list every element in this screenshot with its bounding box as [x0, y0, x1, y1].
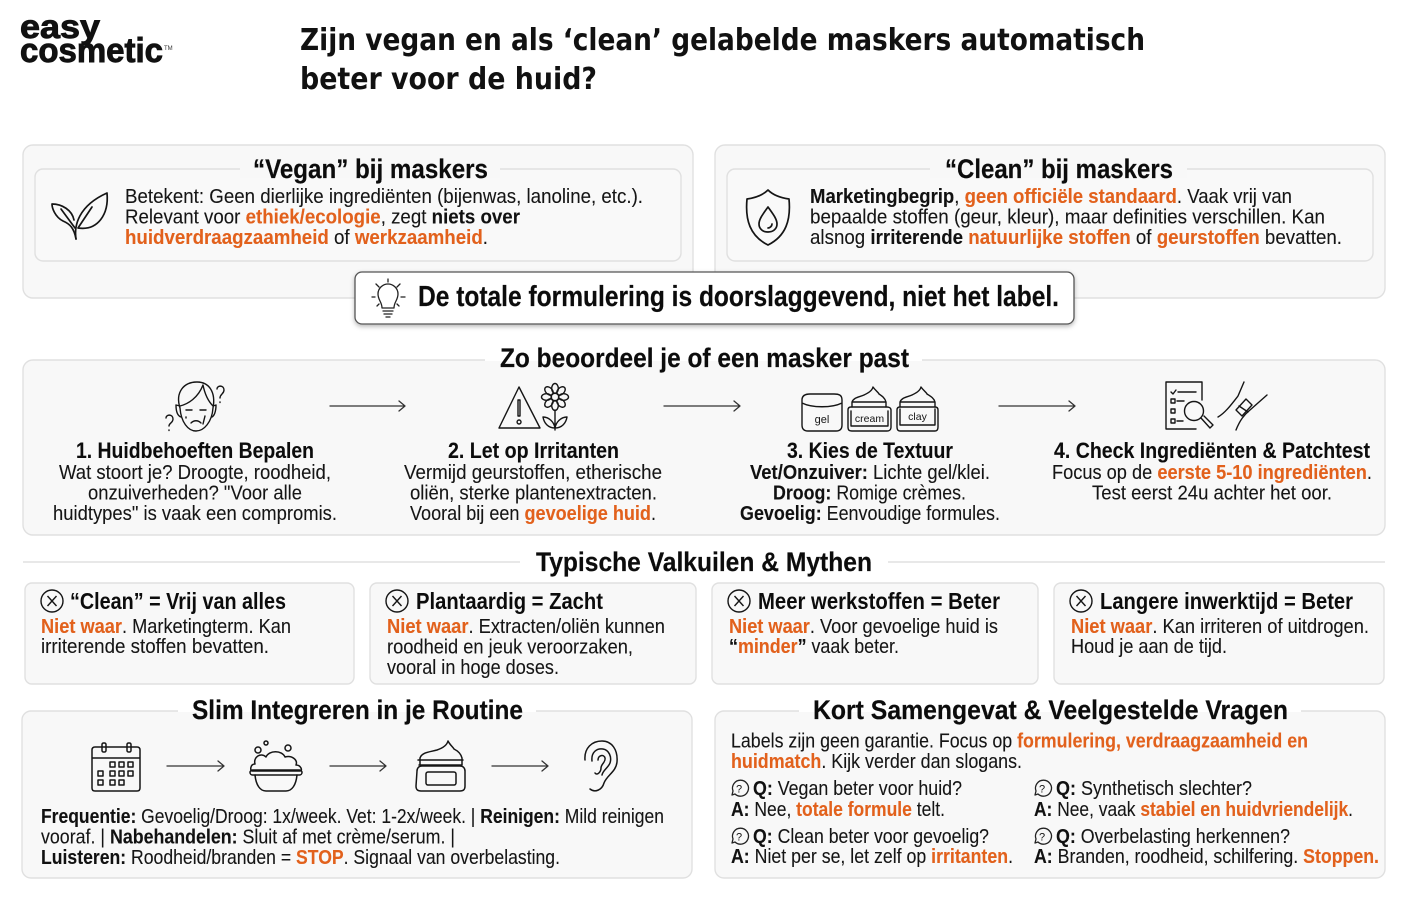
panel: zo beoordeel je: [23, 343, 1385, 535]
card: clean myth: Niet waar. Marketingterm. Kan: [41, 615, 291, 638]
icon: checklist, magnifier and patch: [1166, 382, 1267, 430]
step 2: 2. Let op Irritanten: [448, 438, 619, 463]
step 1: huidtypes" is vaak een compromis.: [53, 502, 337, 525]
card: plant myth: [370, 583, 696, 684]
heading: clean: “Clean” bij maskers: [945, 154, 1173, 184]
icon: bowl with foam: [250, 741, 302, 791]
faq: synthetisch: A: Nee, vaak stabiel en huidvriendelijk.: [1034, 798, 1353, 821]
icon: cross circle: [41, 590, 63, 612]
icon: face with question marks: [166, 382, 224, 431]
card: actives myth: Niet waar. Voor gevoelige huid is: [729, 615, 998, 638]
card: time myth: Langere inwerktijd = Beter: [1100, 588, 1353, 614]
title: Zijn vegan en als ‘clean’ gelabelde maskers automatisch: [300, 23, 1145, 58]
faq: vegan: ?: [736, 784, 742, 796]
card: clean myth: irriterende stoffen bevatten.: [41, 635, 269, 658]
card: clean myth: “Clean” = Vrij van alles: [70, 588, 286, 614]
heading: routine: Slim Integreren in je Routine: [192, 695, 523, 725]
text: vegan body: Betekent: Geen dierlijke ingrediënten (bijenwas, lanoline, etc.).: [125, 185, 643, 208]
icon: cross circle: [386, 590, 408, 612]
panel: routine: [22, 695, 692, 878]
arrow: [167, 761, 224, 771]
faq: synthetisch: [1034, 777, 1353, 821]
panel: summary and faq: [715, 695, 1385, 878]
card: actives myth: “minder” vaak beter.: [729, 635, 899, 658]
arrow: [492, 761, 548, 771]
icon: three jars: cream: [855, 413, 884, 425]
heading: assessment: Zo beoordeel je of een masker past: [500, 343, 909, 373]
text: routine body: Luisteren: Roodheid/branden = STOP. Signaal van overbelasting.: [41, 846, 560, 869]
icon: cross circle: [728, 590, 750, 612]
arrow: [330, 401, 405, 411]
title: beter voor de huid?: [300, 62, 597, 97]
arrow: [999, 401, 1075, 411]
faq: clean: [731, 825, 1013, 868]
card: clean myth: [25, 583, 354, 684]
section: valkuilen: [23, 547, 1385, 684]
faq: overbelasting: ?: [1039, 832, 1045, 844]
step 4: Test eerst 24u achter het oor.: [1092, 482, 1332, 504]
step 2: Vermijd geurstoffen, etherische: [404, 461, 662, 484]
icon: three jars: [802, 387, 938, 431]
card: actives myth: [712, 583, 1038, 684]
text: summary: [731, 730, 1308, 773]
faq: vegan: Q: Vegan beter voor huid?: [753, 777, 962, 800]
text: vegan body: Relevant voor ethiek/ecologie, zegt niets over: [125, 206, 520, 228]
icon: warning and flower: [499, 384, 568, 430]
step 1: Wat stoort je? Droogte, roodheid,: [59, 461, 331, 484]
text: routine body: Frequentie: Gevoelig/Droog: 1x/week. Vet: 1-2x/week. | Reinigen: Mild reinigen: [41, 805, 664, 828]
logo: easy cosmetic: cosmetic: [20, 32, 163, 70]
panel: clean: [715, 145, 1385, 298]
icon: cream jar: [416, 741, 465, 791]
text: clean body: Marketingbegrip, geen officiële standaard. Vaak vrij van: [810, 185, 1292, 208]
text: vegan body: huidverdraagzaamheid of werkzaamheid.: [125, 226, 488, 249]
step 2: Vooral bij een gevoelige huid.: [410, 502, 656, 525]
faq: overbelasting: [1034, 825, 1379, 868]
card: plant myth: Plantaardig = Zacht: [416, 588, 603, 614]
icon: leaves: [52, 193, 107, 239]
faq: clean: A: Niet per se, let zelf op irritanten.: [731, 845, 1013, 868]
faq: overbelasting: Q: Overbelasting herkennen?: [1056, 825, 1290, 848]
text: vegan body: [125, 185, 643, 249]
logo: easy cosmetic: [20, 8, 173, 70]
text: clean body: [810, 185, 1342, 249]
text: routine body: [41, 805, 664, 869]
heading: valkuilen: Typische Valkuilen & Mythen: [536, 547, 872, 577]
card: plant myth: vooral in hoge doses.: [387, 656, 559, 679]
faq: synthetisch: ?: [1039, 784, 1045, 796]
card: time myth: Houd je aan de tijd.: [1071, 635, 1227, 658]
icon: cross circle: [1070, 590, 1092, 612]
step 2: oliën, sterke plantenextracten.: [410, 482, 657, 504]
step 4: Focus op de eerste 5-10 ingrediënten.: [1052, 461, 1372, 484]
step 4: 4. Check Ingrediënten & Patchtest: [1054, 438, 1370, 463]
logo: easy cosmetic: easy: [20, 8, 101, 45]
step 3: Gevoelig: Eenvoudige formules.: [740, 502, 1000, 525]
card: actives myth: Meer werkstoffen = Beter: [758, 588, 1000, 614]
callout: key message: De totale formulering is doorslaggevend, niet het label.: [418, 281, 1059, 313]
faq: clean: Q: Clean beter voor gevoelig?: [753, 825, 989, 848]
icon: three jars: clay: [908, 411, 928, 423]
faq: vegan: [731, 777, 962, 821]
step 3: 3. Kies de Textuur: [787, 438, 953, 463]
panel: vegan: [23, 145, 693, 298]
callout: key message: [355, 272, 1074, 324]
arrow: [664, 401, 740, 411]
step 3: Vet/Onzuiver: Lichte gel/klei.: [750, 461, 990, 484]
step 1: onzuiverheden? "Voor alle: [88, 482, 302, 504]
heading: vegan: “Vegan” bij maskers: [253, 154, 488, 184]
step 1: 1. Huidbehoeften Bepalen: [76, 438, 314, 463]
step 3: Droog: Romige crèmes.: [773, 482, 966, 504]
text: summary: Labels zijn geen garantie. Focus op formulering, verdraagzaamheid en: [731, 730, 1308, 752]
icon: three jars: gel: [815, 414, 829, 426]
arrow: [330, 761, 386, 771]
icon: lightbulb: [372, 279, 405, 317]
step 4: [1052, 382, 1372, 504]
heading: summary: Kort Samengevat & Veelgestelde Vragen: [813, 695, 1288, 725]
text: summary: huidmatch. Kijk verder dan slogans.: [731, 750, 1022, 773]
faq: vegan: A: Nee, totale formule telt.: [731, 798, 945, 821]
text: clean body: bepaalde stoffen (geur, kleur), maar definities verschillen. Kan: [810, 206, 1325, 228]
step 3: [740, 387, 1000, 525]
faq: clean: ?: [736, 832, 742, 844]
step 1: [53, 382, 337, 525]
icon: calendar: [92, 743, 140, 791]
faq: synthetisch: Q: Synthetisch slechter?: [1056, 777, 1252, 800]
card: time myth: Niet waar. Kan irriteren of uitdrogen.: [1071, 615, 1369, 638]
icon: ear: [585, 741, 617, 791]
step 2: [404, 384, 662, 525]
card: plant myth: roodheid en jeuk veroorzaken,: [387, 636, 633, 658]
logo: easy cosmetic: TM: [164, 46, 173, 52]
title: [300, 23, 1145, 97]
text: routine body: vooraf. | Nabehandelen: Sluit af met crème/serum. |: [41, 826, 455, 848]
text: clean body: alsnog irriterende natuurlijke stoffen of geurstoffen bevatten.: [810, 226, 1342, 249]
icon: shield with drop: [747, 190, 789, 245]
card: time myth: [1054, 583, 1384, 684]
faq: overbelasting: A: Branden, roodheid, schilfering. Stoppen.: [1034, 845, 1379, 868]
card: plant myth: Niet waar. Extracten/oliën kunnen: [387, 615, 665, 638]
